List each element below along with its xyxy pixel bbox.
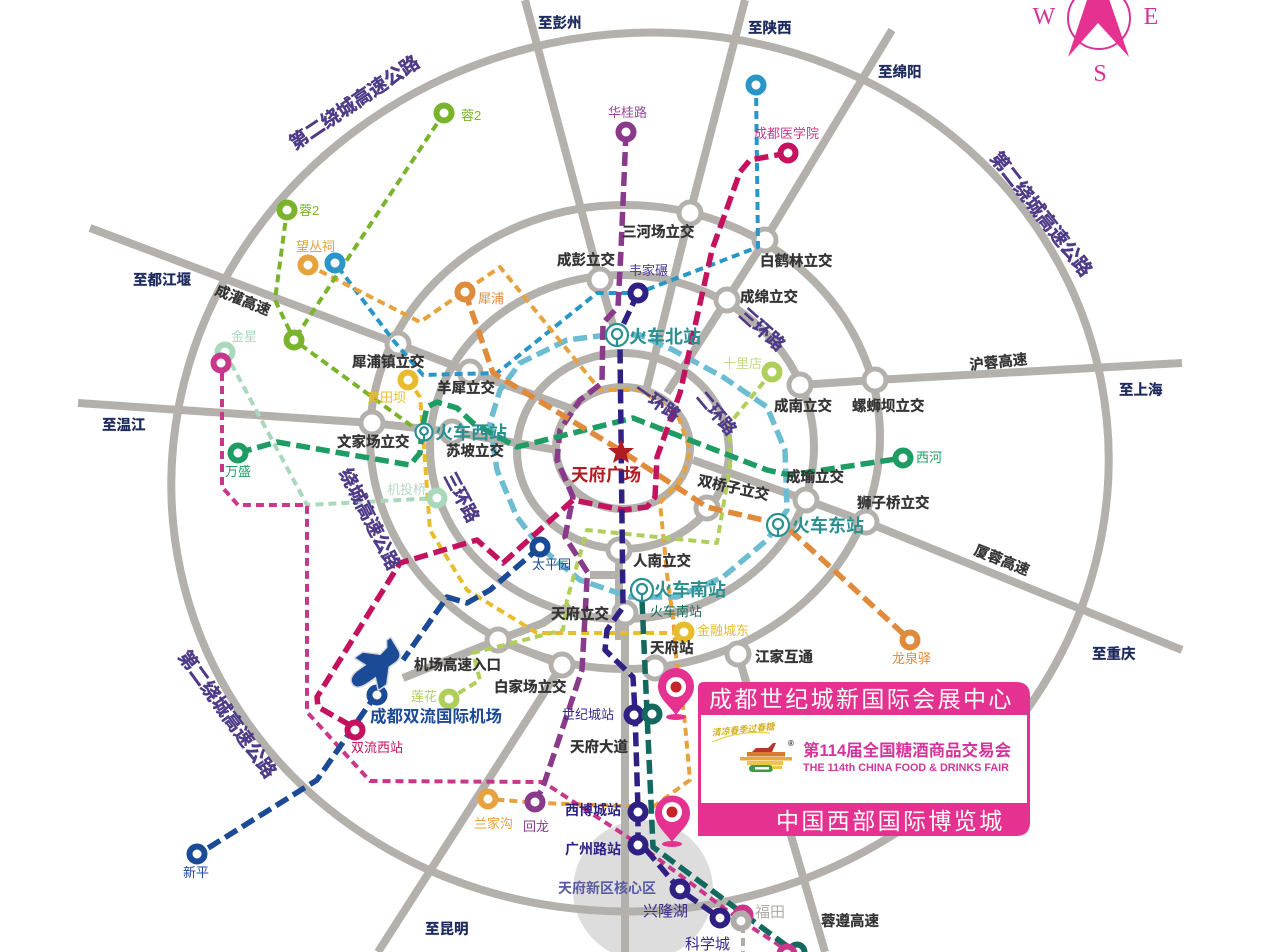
destination labels: 至上海	[1119, 381, 1163, 399]
compass: E	[1144, 4, 1158, 30]
interchange labels: 狮子桥立交	[857, 494, 930, 512]
interchange labels: 苏坡立交	[446, 442, 504, 460]
metro line: indigo north south	[605, 293, 720, 918]
destination labels: 至重庆	[1092, 645, 1136, 663]
panel: fair venue: ®	[788, 739, 794, 748]
metro line: pale green	[225, 352, 437, 505]
metro line: yellow green	[449, 372, 772, 699]
compass: S	[1093, 61, 1107, 87]
station labels: 世纪城站	[562, 707, 614, 722]
fair logo: 清凉春季过春糖	[711, 721, 777, 738]
metro line: crimson	[317, 153, 788, 728]
ring road names	[173, 51, 1097, 782]
railway station labels	[435, 326, 864, 600]
station labels: 西博城站	[565, 802, 621, 818]
interchange labels: 三河场立交	[622, 223, 694, 241]
railway station labels: 火车西站	[435, 422, 507, 443]
interchange labels: 成瑜立交	[786, 468, 844, 486]
interchange labels	[213, 223, 1032, 930]
central star	[608, 439, 634, 463]
station labels: 福田	[755, 904, 785, 921]
interchange labels: 机场高速入口	[414, 656, 501, 674]
railway station labels: 火车北站	[629, 326, 701, 347]
panel: fair venue	[698, 682, 1030, 836]
station labels: 金星	[231, 329, 257, 344]
interchange labels: 白家场立交	[494, 678, 566, 696]
station labels: 太平园	[532, 557, 571, 572]
ring road names: 三环路	[440, 469, 483, 526]
gray extension	[741, 925, 745, 952]
station labels: 机投桥	[387, 482, 426, 497]
map pin: Western China Expo City	[655, 796, 690, 847]
metro line: teal	[642, 600, 795, 952]
station labels: 成都医学院	[754, 126, 819, 141]
stations	[190, 78, 918, 952]
compass	[1033, 0, 1158, 87]
station labels: 兰家沟	[474, 816, 513, 831]
station labels: 成都双流国际机场	[370, 706, 502, 726]
ring road names: 一环路	[631, 380, 683, 425]
destination labels: 至温江	[102, 417, 146, 434]
interchange labels: 天府大道	[570, 738, 628, 756]
metro line: pink	[222, 373, 790, 952]
railway station labels: 火车南站	[654, 579, 726, 600]
interchange labels: 江家互通	[755, 648, 813, 666]
station labels: 新平	[183, 865, 209, 880]
panel: fair venue: 成都世纪城新国际会展中心	[709, 686, 1014, 712]
station labels	[183, 105, 942, 952]
station labels: 广州路站	[565, 841, 621, 857]
station labels: 天府新区核心区	[558, 880, 656, 896]
interchange labels: 螺蛳坝立交	[852, 397, 924, 415]
interchange labels: 双桥子立交	[696, 471, 771, 504]
destination labels: 至绵阳	[878, 64, 922, 81]
station labels: 蓉2	[461, 108, 481, 123]
station labels: 十里店	[723, 356, 762, 371]
metro line: yellow	[408, 380, 683, 633]
map pin: Century City	[658, 668, 694, 720]
ring road names: 二环路	[693, 388, 740, 439]
station labels: 蓉2	[299, 203, 319, 218]
ring road names: 三环路	[735, 304, 789, 355]
ring road names: 第二绕城高速公路	[173, 646, 281, 782]
station labels: 犀浦	[478, 291, 504, 306]
panel: fair venue: 中国西部国际博览城	[776, 808, 1005, 834]
metro line: thin blue	[335, 85, 758, 375]
station labels: 火车南站	[650, 604, 702, 619]
interchange labels: 成灌高速	[213, 281, 273, 320]
interchange labels: 羊犀立交	[437, 379, 495, 397]
station labels: 西河	[916, 450, 942, 465]
airplane icon	[342, 635, 411, 700]
destination labels: 至陕西	[748, 20, 792, 37]
railway station icons	[416, 324, 789, 601]
destination labels: 至都江堰	[133, 272, 191, 289]
metro line: thin orange	[308, 265, 690, 807]
Tianfu Square label: 天府广场	[571, 465, 641, 485]
compass: W	[1033, 4, 1056, 30]
interchange labels: 成绵立交	[740, 288, 798, 306]
destination labels: 至彭州	[538, 14, 582, 32]
ring road names: 绕城高速公路	[335, 465, 405, 574]
metro line: purple	[535, 132, 626, 802]
station labels: 黄田坝	[367, 390, 406, 405]
interchange labels: 天府站	[650, 639, 694, 657]
Tianfu new district core area	[573, 820, 713, 952]
station labels: 华桂路	[608, 105, 647, 120]
fair logo	[711, 721, 792, 772]
interchange nodes	[361, 202, 886, 679]
interchange labels: 厦蓉高速	[972, 541, 1032, 580]
station labels: 莲花	[411, 689, 437, 704]
interchange labels: 成南立交	[774, 397, 832, 415]
panel: fair venue: THE 114th CHINA FOOD & DRINKS FAIR	[803, 762, 1009, 774]
metro line: orange	[465, 292, 910, 640]
ring road names: 第二绕城高速公路	[285, 51, 424, 155]
interchange labels: 沪蓉高速	[969, 350, 1029, 374]
station labels: 双流西站	[351, 740, 403, 755]
metro line: light cyan ring	[490, 335, 787, 597]
interchange labels: 蓉遵高速	[821, 912, 879, 930]
metro line: green east west	[238, 402, 903, 475]
station labels: 望丛祠	[296, 239, 335, 254]
interchange labels: 天府立交	[551, 605, 609, 623]
interchange labels: 白鹤林立交	[760, 252, 832, 270]
station labels: 回龙	[523, 819, 549, 834]
station labels: 兴隆湖	[643, 903, 688, 920]
interchange labels: 文家场立交	[337, 433, 410, 451]
railway station labels: 火车东站	[792, 515, 864, 536]
ring road names: 第二绕城高速公路	[985, 147, 1097, 281]
metro line: green Rong 2	[275, 113, 444, 432]
metro line: blue airport	[197, 547, 540, 855]
destination labels: 至昆明	[425, 921, 468, 938]
station labels: 龙泉驿	[892, 651, 931, 666]
station labels: 金融城东	[697, 623, 749, 638]
interchange labels: 人南立交	[633, 552, 691, 570]
station labels: 韦家碾	[629, 263, 668, 278]
interchange labels: 成彭立交	[557, 251, 615, 269]
station labels: 万盛	[225, 464, 251, 479]
panel: fair venue: 第114届全国糖酒商品交易会	[803, 740, 1012, 760]
interchange labels: 犀浦镇立交	[352, 353, 424, 371]
